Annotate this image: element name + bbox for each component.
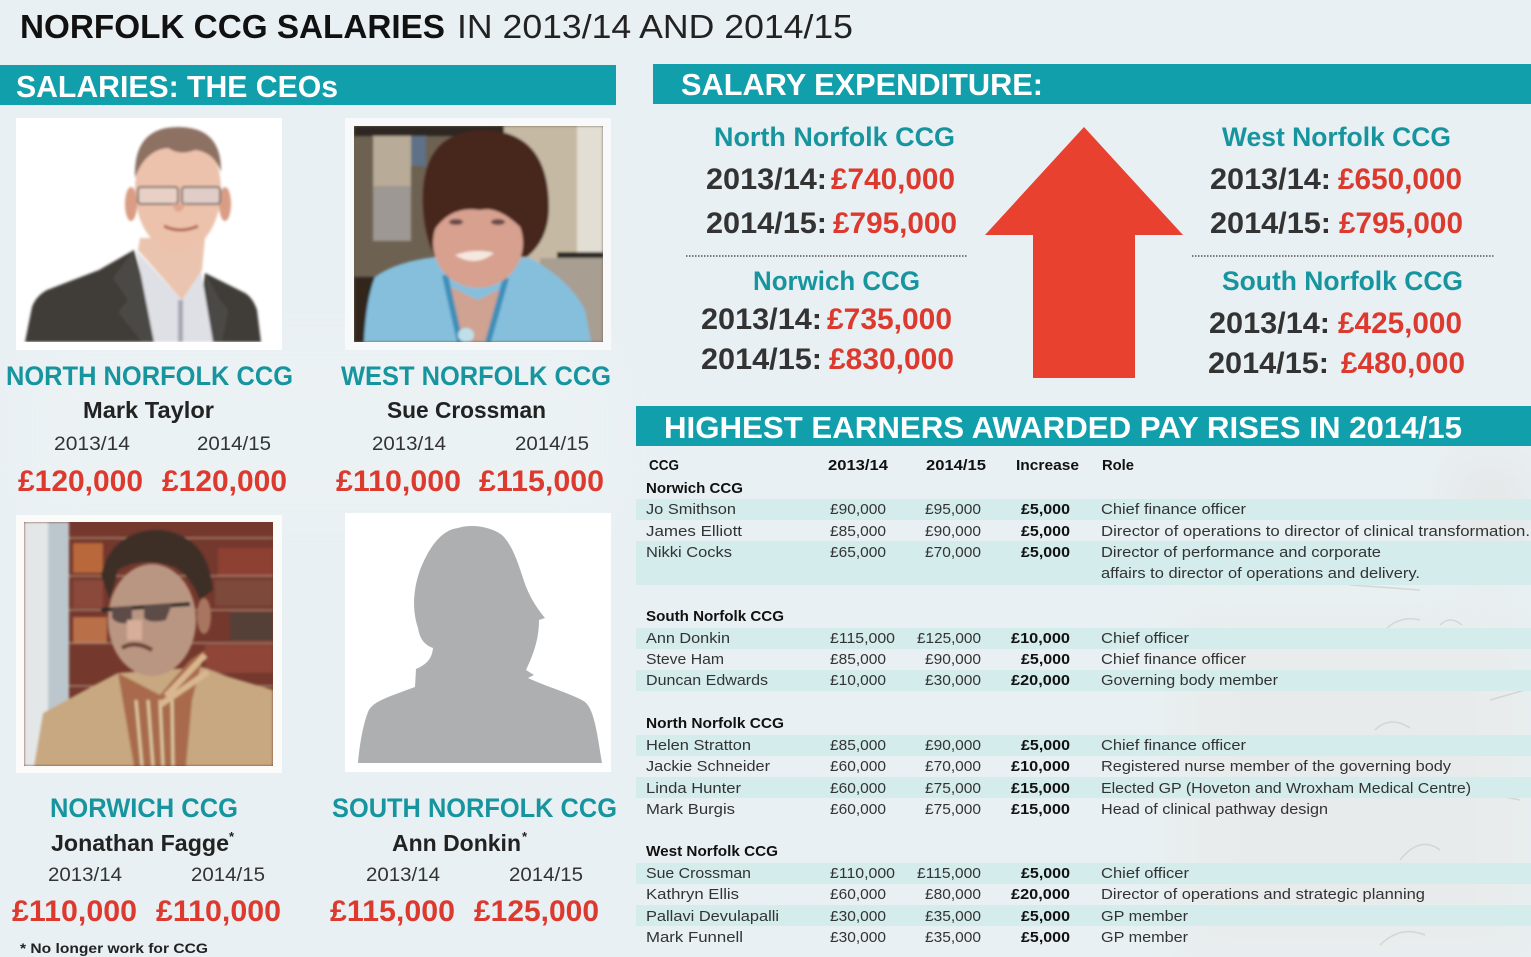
label: West Norfolk CEO: £115,000: [479, 465, 604, 498]
table group: West Norfolk CCG: £5,000: [1021, 865, 1070, 882]
table group: West Norfolk CCG: GP member: [1101, 908, 1188, 925]
label: Norwich CEO: 2014/15: [191, 865, 265, 886]
table group: South Norfolk CCG: £115,000: [830, 630, 895, 647]
table group: North Norfolk CCG: Chief finance officer: [1101, 737, 1246, 754]
table group: West Norfolk CCG: Kathryn Ellis: [646, 886, 739, 903]
table group: West Norfolk CCG: Pallavi Devulapalli: [646, 908, 779, 925]
table group: North Norfolk CCG: £75,000: [925, 780, 981, 797]
label: South Norfolk CEO: *: [522, 829, 528, 844]
table group: South Norfolk CCG: £5,000: [1021, 651, 1070, 668]
table group: Norwich CCG: £85,000: [830, 523, 886, 540]
table group: West Norfolk CCG: £80,000: [925, 886, 981, 903]
table group: North Norfolk CCG: Head of clinical pathway design: [1101, 801, 1328, 818]
table group: North Norfolk CCG: [646, 715, 1471, 818]
figures: West Norfolk CCG: West Norfolk CCG: [1222, 122, 1451, 152]
table group: Norwich CCG: James Elliott: [646, 523, 743, 540]
table header: Increase: [1016, 457, 1079, 474]
label: South Norfolk CEO: 2013/14: [366, 865, 440, 886]
heading: salary expenditure: [653, 64, 1531, 104]
label: North Norfolk CEO: Mark Taylor: [83, 397, 214, 423]
photo: Sue Crossman: [354, 126, 603, 342]
table group: West Norfolk CCG: £20,000: [1011, 886, 1070, 903]
figures: South Norfolk CCG: 2013/14:: [1209, 307, 1330, 340]
table group: West Norfolk CCG: £30,000: [830, 929, 886, 946]
table header: CCG: [649, 457, 679, 474]
table group: Norwich CCG: £65,000: [830, 544, 886, 561]
figures: South Norfolk CCG: 2014/15:: [1208, 347, 1329, 380]
photo: Mark Taylor: [25, 127, 261, 342]
table group: North Norfolk CCG: £90,000: [925, 737, 981, 754]
table group: South Norfolk CCG: £30,000: [925, 672, 981, 689]
label: South Norfolk CEO: [330, 793, 617, 928]
icon: silhouette for Ann Donkin: [358, 526, 602, 763]
figures: Norwich CCG: [701, 266, 954, 376]
table group: South Norfolk CCG: Ann Donkin: [646, 630, 730, 647]
figures: North Norfolk CCG: 2014/15:: [706, 207, 827, 240]
table group: South Norfolk CCG: Governing body member: [1101, 672, 1278, 689]
table group: South Norfolk CCG: £85,000: [830, 651, 886, 668]
table group: Norwich CCG: £90,000: [925, 523, 981, 540]
table group: North Norfolk CCG: Mark Burgis: [646, 801, 735, 818]
table group: North Norfolk CCG: £60,000: [830, 780, 886, 797]
table group: North Norfolk CCG: £15,000: [1011, 780, 1070, 797]
label: West Norfolk CEO: WEST NORFOLK CCG: [341, 361, 611, 391]
title: IN 2013/14 AND 2014/15: [457, 8, 853, 45]
label: Norwich CEO: £110,000: [12, 895, 137, 928]
table group: South Norfolk CCG: £90,000: [925, 651, 981, 668]
panel: CEO salaries: [0, 65, 617, 956]
table group: Norwich CCG: £5,000: [1021, 523, 1070, 540]
table header: 2013/14: [828, 457, 889, 474]
table group: Norwich CCG: [646, 480, 1530, 582]
table row bands: [636, 499, 1531, 926]
label: South Norfolk CEO: SOUTH NORFOLK CCG: [332, 793, 617, 823]
label: North Norfolk CEO: £120,000: [18, 465, 143, 498]
figures: South Norfolk CCG: £425,000: [1338, 307, 1462, 340]
table group: South Norfolk CCG: [646, 608, 1278, 689]
table group: West Norfolk CCG: £110,000: [830, 865, 895, 882]
table group: South Norfolk CCG: £20,000: [1011, 672, 1070, 689]
table group: Norwich CCG: Norwich CCG: [646, 480, 743, 497]
table group: West Norfolk CCG: £60,000: [830, 886, 886, 903]
table group: Norwich CCG: Chief finance officer: [1101, 501, 1246, 518]
heading: salaries the CEOs: [0, 65, 616, 105]
figures: South Norfolk CCG: [1208, 266, 1465, 380]
label: Norwich CEO: Jonathan Fagge: [51, 830, 229, 856]
card: South Norfolk photo frame: [345, 513, 611, 772]
table group: North Norfolk CCG: £15,000: [1011, 801, 1070, 818]
table group: South Norfolk CCG: £10,000: [830, 672, 886, 689]
figures: West Norfolk CCG: [1210, 122, 1463, 240]
table group: North Norfolk CCG: North Norfolk CCG: [646, 715, 784, 732]
label: South Norfolk CEO: £125,000: [474, 895, 599, 928]
table group: Norwich CCG: Director of performance and corporate: [1101, 544, 1381, 561]
table group: Norwich CCG: £5,000: [1021, 544, 1070, 561]
table group: North Norfolk CCG: Helen Stratton: [646, 737, 751, 754]
label: West Norfolk CEO: 2013/14: [372, 434, 446, 455]
table group: West Norfolk CCG: Mark Funnell: [646, 929, 743, 946]
title: NORFOLK CCG SALARIES: [20, 8, 445, 45]
label: West Norfolk CEO: [336, 361, 611, 498]
heading: salary expenditure: SALARY EXPENDITURE:: [681, 67, 1043, 102]
table group: West Norfolk CCG: £35,000: [925, 929, 981, 946]
table group: North Norfolk CCG: £85,000: [830, 737, 886, 754]
table group: North Norfolk CCG: £60,000: [830, 801, 886, 818]
table group: South Norfolk CCG: Steve Ham: [646, 651, 724, 668]
table group: North Norfolk CCG: £60,000: [830, 758, 886, 775]
panel: salary expenditure: [653, 64, 1531, 380]
figures: North Norfolk CCG: 2013/14:: [706, 163, 827, 196]
table group: North Norfolk CCG: £70,000: [925, 758, 981, 775]
footnote: * No longer work for CCG: [20, 940, 208, 956]
table header: 2014/15: [926, 457, 986, 474]
table group: North Norfolk CCG: £10,000: [1011, 758, 1070, 775]
figures: North Norfolk CCG: North Norfolk CCG: [714, 122, 955, 152]
table header: Role: [1102, 457, 1134, 474]
table group: Norwich CCG: Jo Smithson: [646, 501, 736, 518]
figures: West Norfolk CCG: £795,000: [1339, 207, 1463, 240]
label: North Norfolk CEO: NORTH NORFOLK CCG: [6, 361, 293, 391]
figures: West Norfolk CCG: 2013/14:: [1210, 163, 1331, 196]
figures: West Norfolk CCG: £650,000: [1338, 163, 1462, 196]
table group: Norwich CCG: affairs to director of operations and delivery.: [1101, 565, 1420, 582]
table group: South Norfolk CCG: £10,000: [1011, 630, 1070, 647]
label: Norwich CEO: [12, 793, 281, 928]
table group: West Norfolk CCG: West Norfolk CCG: [646, 843, 778, 860]
table group: North Norfolk CCG: Linda Hunter: [646, 780, 741, 797]
table group: West Norfolk CCG: £30,000: [830, 908, 886, 925]
figures: North Norfolk CCG: £795,000: [833, 207, 957, 240]
table group: West Norfolk CCG: GP member: [1101, 929, 1188, 946]
table group: West Norfolk CCG: £5,000: [1021, 929, 1070, 946]
label: Norwich CEO: NORWICH CCG: [50, 793, 238, 823]
figures: Norwich CCG: 2014/15:: [701, 343, 822, 376]
figures: Norwich CCG: £830,000: [829, 343, 954, 376]
panel: highest earners table: [636, 406, 1531, 946]
label: North Norfolk CEO: [6, 361, 293, 498]
table group: West Norfolk CCG: Sue Crossman: [646, 865, 751, 882]
label: North Norfolk CEO: £120,000: [162, 465, 287, 498]
label: West Norfolk CEO: 2014/15: [515, 434, 589, 455]
label: North Norfolk CEO: 2013/14: [54, 434, 130, 455]
table group: North Norfolk CCG: £5,000: [1021, 737, 1070, 754]
table group: South Norfolk CCG: South Norfolk CCG: [646, 608, 784, 625]
card: Norwich photo frame: [16, 515, 282, 773]
figures: West Norfolk CCG: 2014/15:: [1210, 207, 1331, 240]
table header: [649, 457, 1134, 474]
figures: Norwich CCG: Norwich CCG: [753, 266, 920, 296]
table group: South Norfolk CCG: £125,000: [917, 630, 981, 647]
label: West Norfolk CEO: £110,000: [336, 465, 461, 498]
table group: Norwich CCG: £90,000: [830, 501, 886, 518]
table group: South Norfolk CCG: Chief finance officer: [1101, 651, 1246, 668]
arrow: increase: [985, 127, 1183, 378]
figures: South Norfolk CCG: South Norfolk CCG: [1222, 266, 1463, 296]
table group: North Norfolk CCG: Jackie Schneider: [646, 758, 770, 775]
table group: West Norfolk CCG: Director of operations and strategic planning: [1101, 886, 1425, 903]
table group: Norwich CCG: £5,000: [1021, 501, 1070, 518]
figures: North Norfolk CCG: [706, 122, 957, 240]
table group: North Norfolk CCG: Elected GP (Hoveton and Wroxham Medical Centre): [1101, 780, 1471, 797]
figures: Norwich CCG: 2013/14:: [701, 303, 822, 336]
card: West Norfolk photo frame: [345, 118, 611, 350]
label: West Norfolk CEO: Sue Crossman: [387, 397, 546, 423]
table group: West Norfolk CCG: £35,000: [925, 908, 981, 925]
label: Norwich CEO: *: [229, 829, 235, 844]
table group: North Norfolk CCG: £75,000: [925, 801, 981, 818]
table group: Norwich CCG: £70,000: [925, 544, 981, 561]
table group: West Norfolk CCG: £115,000: [917, 865, 981, 882]
figures: North Norfolk CCG: £740,000: [831, 163, 955, 196]
table group: West Norfolk CCG: £5,000: [1021, 908, 1070, 925]
label: Norwich CEO: £110,000: [156, 895, 281, 928]
heading: salaries the CEOs: SALARIES: THE CEOs: [16, 69, 338, 104]
label: South Norfolk CEO: 2014/15: [509, 865, 583, 886]
table group: South Norfolk CCG: Chief officer: [1101, 630, 1189, 647]
table group: Norwich CCG: Director of operations to director of clinical transformation.: [1101, 523, 1530, 540]
table group: West Norfolk CCG: Chief officer: [1101, 865, 1189, 882]
table group: Norwich CCG: Nikki Cocks: [646, 544, 732, 561]
label: South Norfolk CEO: Ann Donkin: [392, 830, 521, 856]
title: [20, 8, 853, 45]
table group: South Norfolk CCG: Duncan Edwards: [646, 672, 768, 689]
card: North Norfolk photo frame: [16, 118, 282, 350]
table group: West Norfolk CCG: [646, 843, 1425, 946]
photo: Jonathan Fagge: [24, 522, 273, 766]
label: South Norfolk CEO: £115,000: [330, 895, 455, 928]
figures: Norwich CCG: £735,000: [827, 303, 952, 336]
table group: North Norfolk CCG: Registered nurse member of the governing body: [1101, 758, 1452, 775]
label: North Norfolk CEO: 2014/15: [197, 434, 271, 455]
table group: Norwich CCG: £95,000: [925, 501, 981, 518]
label: Norwich CEO: 2013/14: [48, 865, 122, 886]
heading: highest earners: HIGHEST EARNERS AWARDED PAY RISES IN 2014/15: [664, 410, 1462, 445]
figures: South Norfolk CCG: £480,000: [1341, 347, 1465, 380]
